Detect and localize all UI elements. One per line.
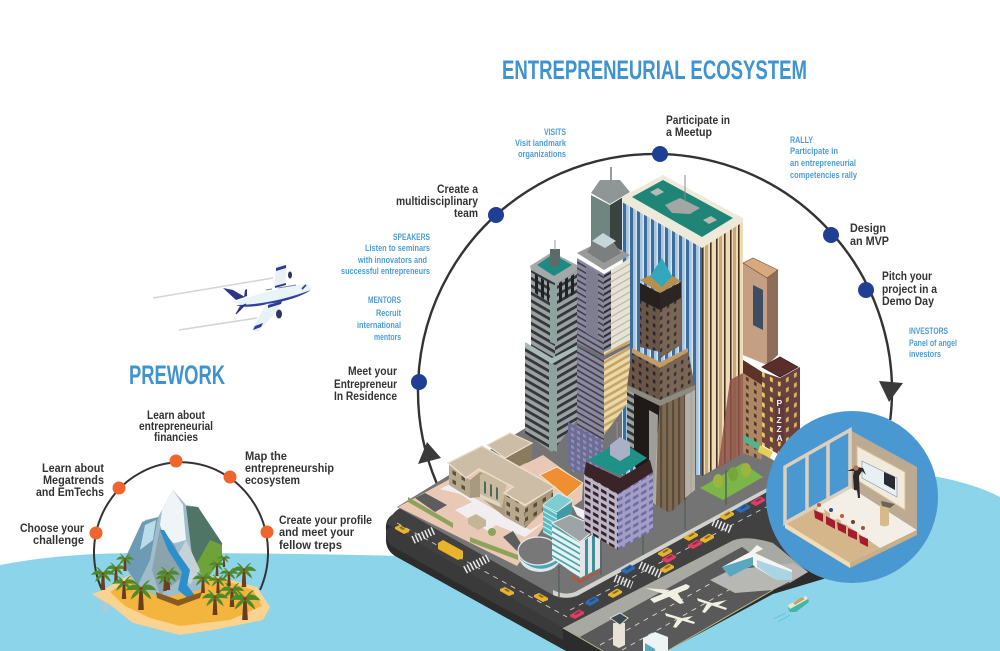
prework labels: Learn about xyxy=(42,461,104,475)
ecosystem activity notes: with innovators and xyxy=(357,255,427,265)
prework labels: challenge xyxy=(33,533,84,547)
mid pale tower xyxy=(577,233,630,440)
ecosystem milestone labels: Meet your xyxy=(348,364,397,378)
prework labels: Learn about xyxy=(147,408,205,422)
terminal xyxy=(710,563,808,593)
pizza sign: Z xyxy=(776,415,782,425)
platform base xyxy=(386,380,830,651)
milestone dots xyxy=(411,146,874,390)
prework labels: entrepreneurship xyxy=(245,461,334,475)
illustration: civic building xyxy=(448,433,555,530)
ecosystem milestone labels: Participate in xyxy=(666,113,730,127)
ecosystem activity notes: international xyxy=(357,320,401,330)
background sea xyxy=(0,477,1000,651)
ecosystem activity notes: an entrepreneurial xyxy=(790,158,856,168)
podium xyxy=(880,505,889,526)
ecosystem activity notes: MENTORS xyxy=(368,295,401,305)
back wall xyxy=(850,430,917,530)
prework heading: PREWORK xyxy=(129,360,225,390)
pizza sign: Z xyxy=(776,424,782,434)
ecosystem milestone labels: Demo Day xyxy=(882,294,934,308)
arrow: up into city xyxy=(418,442,441,464)
rotunda xyxy=(519,540,561,572)
white plaza xyxy=(440,484,545,537)
prework labels: Map the xyxy=(245,449,287,463)
rear wing xyxy=(505,443,532,467)
pizza sign xyxy=(775,397,784,443)
ecosystem activity notes: organizations xyxy=(518,149,566,159)
prework labels: Create your profile xyxy=(279,513,372,527)
plaza kiosk xyxy=(468,514,486,530)
road surface xyxy=(387,380,820,651)
window wall xyxy=(785,430,850,523)
ecosystem activity notes: Listen to seminars xyxy=(365,243,430,253)
pizza sign: P xyxy=(776,398,782,408)
prework labels: Megatrends xyxy=(43,473,104,487)
ecosystem milestone labels: team xyxy=(454,206,478,220)
prework labels xyxy=(20,408,372,552)
illustration: island xyxy=(91,490,270,635)
left dark tower xyxy=(525,240,578,452)
vehicles xyxy=(395,496,765,619)
presenter xyxy=(847,465,866,498)
brown art deco tower xyxy=(627,258,695,513)
mountain xyxy=(123,490,222,598)
ecosystem activity notes: competencies rally xyxy=(790,170,858,180)
small airport building xyxy=(643,632,668,651)
white office xyxy=(552,525,580,578)
prework labels: and EmTechs xyxy=(36,485,104,499)
ecosystem activity notes: Panel of angel xyxy=(909,338,957,348)
ecosystem activity notes: successful entrepreneurs xyxy=(341,266,430,276)
ecosystem activity notes xyxy=(341,127,957,359)
prework labels: financies xyxy=(154,430,198,444)
pizza sign: A xyxy=(776,433,783,443)
illustration: teal-roof tower xyxy=(584,422,653,550)
prework labels: entrepreneurial xyxy=(139,419,213,433)
ecosystem journey arc xyxy=(411,146,903,483)
pizza sign: I xyxy=(778,406,780,416)
prework journey arc xyxy=(90,454,274,590)
ecosystem activity notes: Visit landmark xyxy=(515,138,567,148)
pizza brick building xyxy=(743,357,800,460)
ecosystem activity notes: investors xyxy=(909,349,941,359)
low purple annex xyxy=(568,422,603,472)
walls xyxy=(449,464,470,498)
prework labels: ecosystem xyxy=(245,473,300,487)
pink lot xyxy=(398,455,583,566)
ecosystem activity notes: Participate in xyxy=(790,146,838,156)
basketball court xyxy=(540,467,583,497)
shop awnings xyxy=(744,435,760,451)
ecosystem activity notes: SPEAKERS xyxy=(393,232,430,242)
contrails xyxy=(153,278,273,330)
park xyxy=(700,463,763,500)
pavilion xyxy=(480,468,507,508)
whiteboard xyxy=(862,461,897,497)
ecosystem activity notes: INVESTORS xyxy=(909,326,948,336)
hedges xyxy=(408,497,518,560)
illustration: white office and rotunda xyxy=(518,493,602,583)
city block xyxy=(397,370,790,598)
ecosystem milestone labels xyxy=(334,113,937,403)
lamp posts xyxy=(559,495,685,598)
prework labels: fellow treps xyxy=(279,538,342,552)
icon: airplane xyxy=(153,264,311,332)
parking xyxy=(415,493,522,552)
planes xyxy=(645,584,727,628)
ecosystem activity notes: Recruit xyxy=(376,308,401,318)
arrow: down to demo day xyxy=(879,381,903,402)
prework labels: Choose your xyxy=(20,521,84,535)
palms xyxy=(91,567,115,590)
prework labels: and meet your xyxy=(279,525,354,539)
apron xyxy=(580,547,790,651)
ecosystem milestone labels: Create a xyxy=(437,182,478,196)
ecosystem milestone labels: Pitch your xyxy=(882,269,932,283)
tall glass tower xyxy=(622,175,743,476)
airport strip xyxy=(563,538,808,637)
back grey tower xyxy=(591,167,630,250)
ecosystem activity notes: RALLY xyxy=(790,135,813,145)
ecosystem milestone labels: an MVP xyxy=(850,234,889,248)
ecosystem activity notes: VISITS xyxy=(544,127,566,137)
illustration: skyscrapers xyxy=(525,167,800,513)
roof xyxy=(448,446,555,505)
road markings xyxy=(397,505,770,617)
sand xyxy=(92,573,270,635)
ecosystem milestone labels: Design xyxy=(850,221,886,235)
teal tower xyxy=(543,505,557,540)
ecosystem milestone labels: Entrepreneur xyxy=(334,377,397,391)
illustration: city platform xyxy=(386,370,830,651)
ecosystem milestone labels: multidisciplinary xyxy=(396,194,478,208)
title: ENTREPRENEURIAL ECOSYSTEM xyxy=(502,55,807,85)
prework dots xyxy=(90,454,274,540)
ecosystem milestone labels: project in a xyxy=(882,282,937,296)
ecosystem milestone labels: In Residence xyxy=(334,389,397,403)
tan apartment block xyxy=(743,258,778,365)
river xyxy=(160,530,196,600)
illustration: boat xyxy=(773,596,809,622)
room floor xyxy=(785,487,917,563)
upper vertical windows xyxy=(535,274,574,303)
ecosystem activity notes: mentors xyxy=(374,332,401,342)
ecosystem milestone labels: a Meetup xyxy=(666,125,712,139)
control tower xyxy=(610,613,628,648)
panel: demo day room xyxy=(766,411,938,583)
audience xyxy=(814,503,868,547)
